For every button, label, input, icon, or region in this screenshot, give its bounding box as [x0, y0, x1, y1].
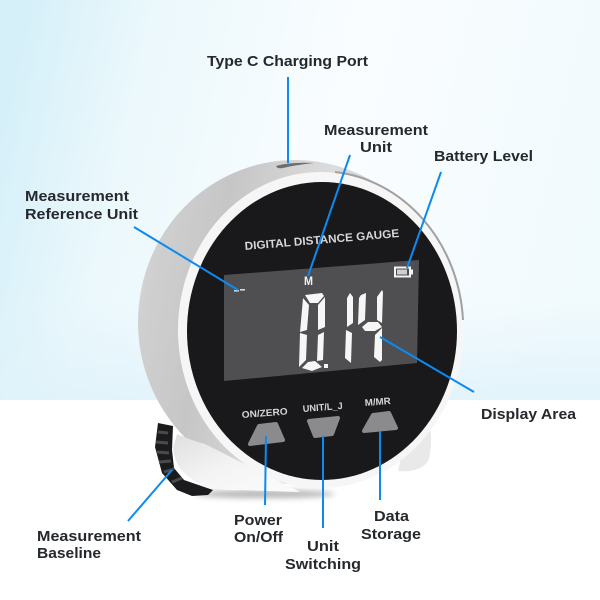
- M/MR label: M/MR: [364, 396, 391, 409]
- label: Unit Switching: Switching: [285, 556, 361, 573]
- label: Measurement Baseline: Measurement: [37, 528, 141, 545]
- label: Measurement Reference Unit: Measurement: [25, 188, 129, 205]
- white rim: [178, 172, 463, 488]
- arrow: battery level: [407, 172, 441, 268]
- wall lower tint: [0, 300, 600, 400]
- right foot: [398, 424, 431, 471]
- label: Power On/Off: On/Off: [234, 529, 284, 546]
- unit letter M: M: [304, 276, 313, 288]
- label: Measurement Reference Unit: [25, 188, 138, 223]
- label: Power On/Off: Power: [234, 512, 282, 529]
- label: Display Area: Display Area: [481, 406, 577, 423]
- wheel knurling: [156, 432, 182, 482]
- background wall: [0, 0, 600, 400]
- contact shadow: [195, 490, 335, 498]
- label: Measurement Baseline: Baseline: [37, 545, 101, 562]
- UNIT label: UNIT/L_J: [302, 401, 343, 415]
- arrow: measurement unit: [308, 155, 350, 276]
- product name: DIGITAL DISTANCE GAUGE: [244, 228, 400, 253]
- label: Unit Switching: Unit: [307, 538, 339, 555]
- label: Type C Charging Port: Type C Charging Port: [207, 53, 368, 70]
- label: Measurement Unit: Unit: [360, 139, 392, 156]
- reference unit indicator: [234, 289, 245, 292]
- UNIT button: [309, 418, 338, 436]
- label: Battery Level: Battery Level: [434, 148, 533, 165]
- arrow: unit switching: [322, 436, 324, 528]
- type C port slot: [276, 163, 314, 168]
- label: Power On/Off: [234, 512, 284, 546]
- ON/ZERO label: ON/ZERO: [241, 406, 288, 421]
- label: Measurement Unit: [324, 122, 428, 156]
- ON/ZERO button: [250, 424, 283, 444]
- M/MR button: [364, 413, 396, 431]
- reading 0.14: [299, 290, 383, 371]
- measuring wheel: [155, 423, 213, 496]
- arrow: baseline: [128, 470, 172, 521]
- arrow: charging port: [287, 77, 289, 163]
- silver housing: [138, 160, 452, 484]
- label: Data Storage: [361, 508, 421, 543]
- arrow: reference unit: [134, 227, 238, 290]
- floor: [0, 400, 600, 600]
- left foot: [173, 434, 300, 492]
- label: Data Storage: Storage: [361, 526, 421, 543]
- label: Measurement Unit: Measurement: [324, 122, 428, 139]
- black face: [187, 182, 457, 480]
- LCD screen: [224, 260, 419, 381]
- label: Unit Switching: [285, 538, 361, 573]
- device: digital distance gauge: [138, 160, 463, 498]
- label: Data Storage: Data: [374, 508, 410, 525]
- label: Measurement Baseline: [37, 528, 141, 562]
- arrow: power: [265, 436, 266, 505]
- arrow: data storage: [379, 431, 381, 500]
- battery icon: [395, 268, 413, 276]
- arrow: display area: [380, 337, 474, 392]
- gray rim edge upper right: [335, 172, 463, 320]
- label: Measurement Reference Unit: Reference Unit: [25, 206, 138, 223]
